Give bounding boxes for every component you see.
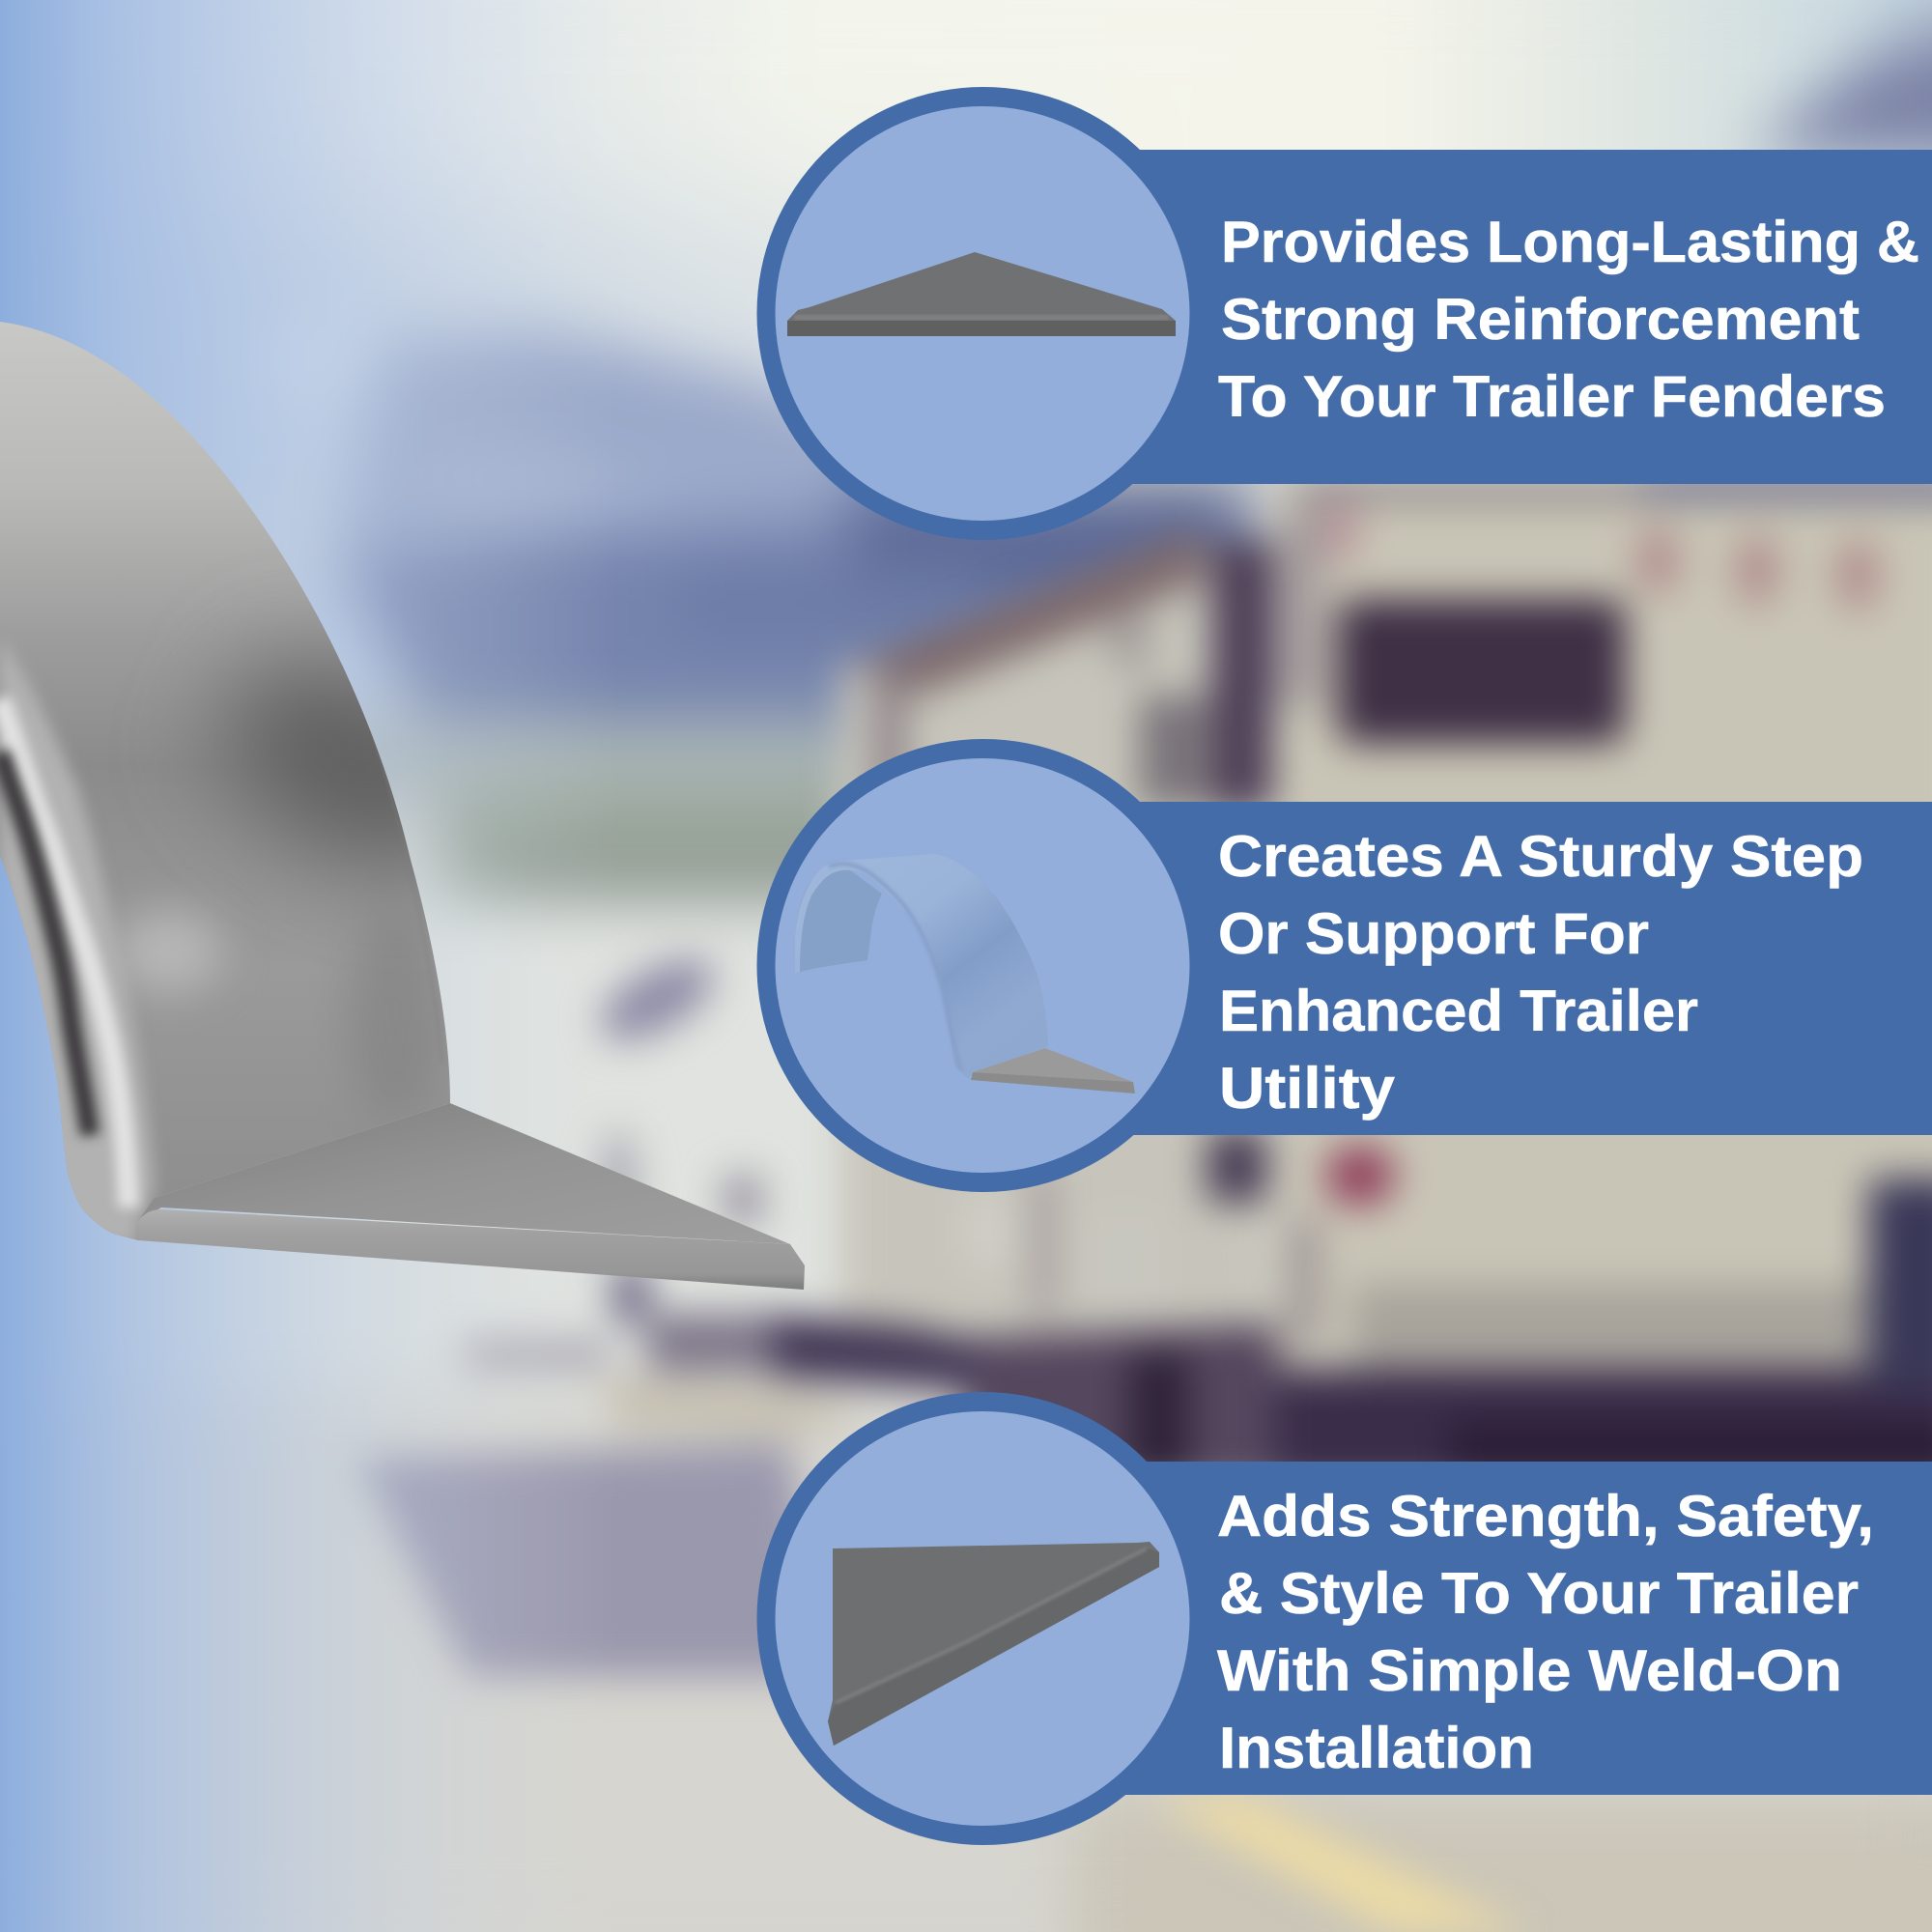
text: callout 3: With Simple Weld-On: [1217, 1638, 1842, 1703]
circle 3 outer ring: [757, 1392, 1209, 1845]
fender body: [0, 322, 450, 1240]
text: callout 1: To Your Trailer Fenders: [1218, 364, 1886, 429]
callout 3: strength, safety, style: [757, 1392, 1932, 1845]
text: callout 2: [1218, 824, 1863, 1121]
callout band 3: [1111, 1462, 1932, 1795]
main product photo: weld-on fender with step gusset: [0, 322, 805, 1290]
text: callout 3: [1217, 1484, 1874, 1780]
callout band 1: [1111, 150, 1932, 484]
callout 2: sturdy step or support: [757, 739, 1932, 1192]
icon: gusset front view: [787, 252, 1176, 336]
text: callout 3: Adds Strength, Safety,: [1217, 1484, 1874, 1548]
text: callout 2: Utility: [1219, 1056, 1396, 1121]
circle 2 outer ring: [757, 739, 1209, 1192]
text: callout 2: Enhanced Trailer: [1219, 979, 1698, 1043]
text: callout 1: Provides Long-Lasting &: [1221, 210, 1919, 274]
text: callout 2: Or Support For: [1218, 901, 1649, 966]
step gusset front edge: [138, 1209, 805, 1290]
text: callout 1: [1218, 210, 1919, 429]
text: callout 3: Installation: [1219, 1716, 1534, 1780]
step gusset top face: [138, 1103, 790, 1244]
callout band 2: [1111, 802, 1932, 1135]
circle 1 inner disc: [775, 106, 1190, 521]
text: callout 3: & Style To Your Trailer: [1219, 1561, 1859, 1626]
text: callout 1: Strong Reinforcement: [1221, 287, 1860, 352]
circle 3 inner disc: [775, 1411, 1190, 1826]
circle 1 outer ring: [757, 87, 1209, 540]
icon: fender with highlighted step: [795, 854, 1135, 1094]
text: callout 2: Creates A Sturdy Step: [1218, 824, 1863, 889]
callout 1: long-lasting reinforcement: [757, 87, 1932, 540]
circle 2 inner disc: [775, 758, 1190, 1173]
icon: gusset top view: [828, 1542, 1159, 1746]
